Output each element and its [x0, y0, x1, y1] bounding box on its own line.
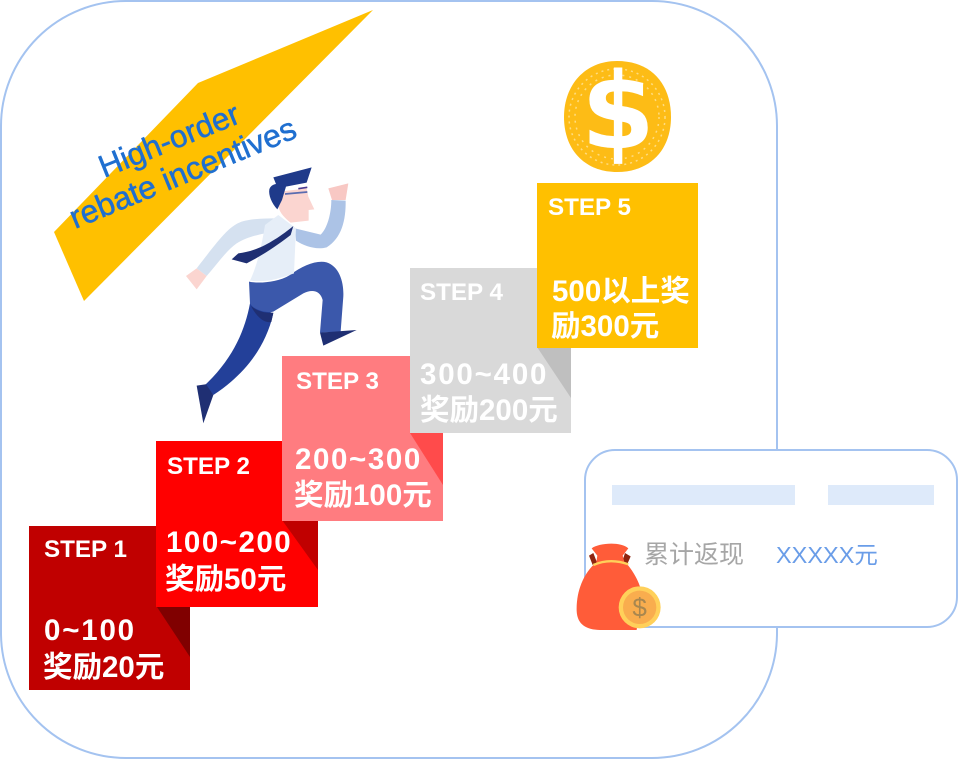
step 3: 奖励100元 — [294, 479, 432, 512]
step 3 — [282, 356, 443, 521]
step 3: 200~300 — [295, 443, 422, 476]
card: cumulative cashback: XXXXX元 — [776, 542, 878, 568]
step 2 — [156, 441, 318, 607]
step 1: 奖励20元 — [43, 651, 164, 684]
step 5 — [537, 183, 698, 348]
step 1: STEP 1 — [44, 536, 127, 563]
step 4: STEP 4 — [420, 279, 503, 306]
card: cumulative cashback: 累计返现 — [644, 541, 744, 569]
step 1 — [29, 526, 190, 690]
step 4: 奖励200元 — [420, 394, 558, 427]
icon: dollar coin: $ — [581, 50, 655, 173]
illustration: running businessman — [186, 167, 357, 423]
banner: high-order rebate incentives — [54, 10, 373, 301]
icon: money bag with coin — [577, 544, 661, 630]
step 5: STEP 5 — [548, 194, 631, 221]
banner: high-order rebate incentives: High-order — [93, 95, 245, 184]
step 1: 0~100 — [44, 614, 136, 647]
card: cumulative cashback — [585, 450, 957, 627]
banner: high-order rebate incentives: rebate incentives — [64, 110, 301, 235]
step 5: 500以上奖 — [552, 275, 690, 308]
step 5: 励300元 — [551, 310, 659, 343]
step 4: 300~400 — [420, 358, 548, 391]
icon: dollar coin — [564, 50, 671, 173]
step 2: STEP 2 — [167, 453, 250, 480]
icon: money bag with coin: $ — [632, 593, 647, 623]
step 4 — [410, 268, 571, 433]
outer rounded panel — [1, 1, 777, 758]
step 2: 100~200 — [166, 526, 292, 559]
step 2: 奖励50元 — [165, 563, 286, 596]
step 3: STEP 3 — [296, 368, 379, 395]
